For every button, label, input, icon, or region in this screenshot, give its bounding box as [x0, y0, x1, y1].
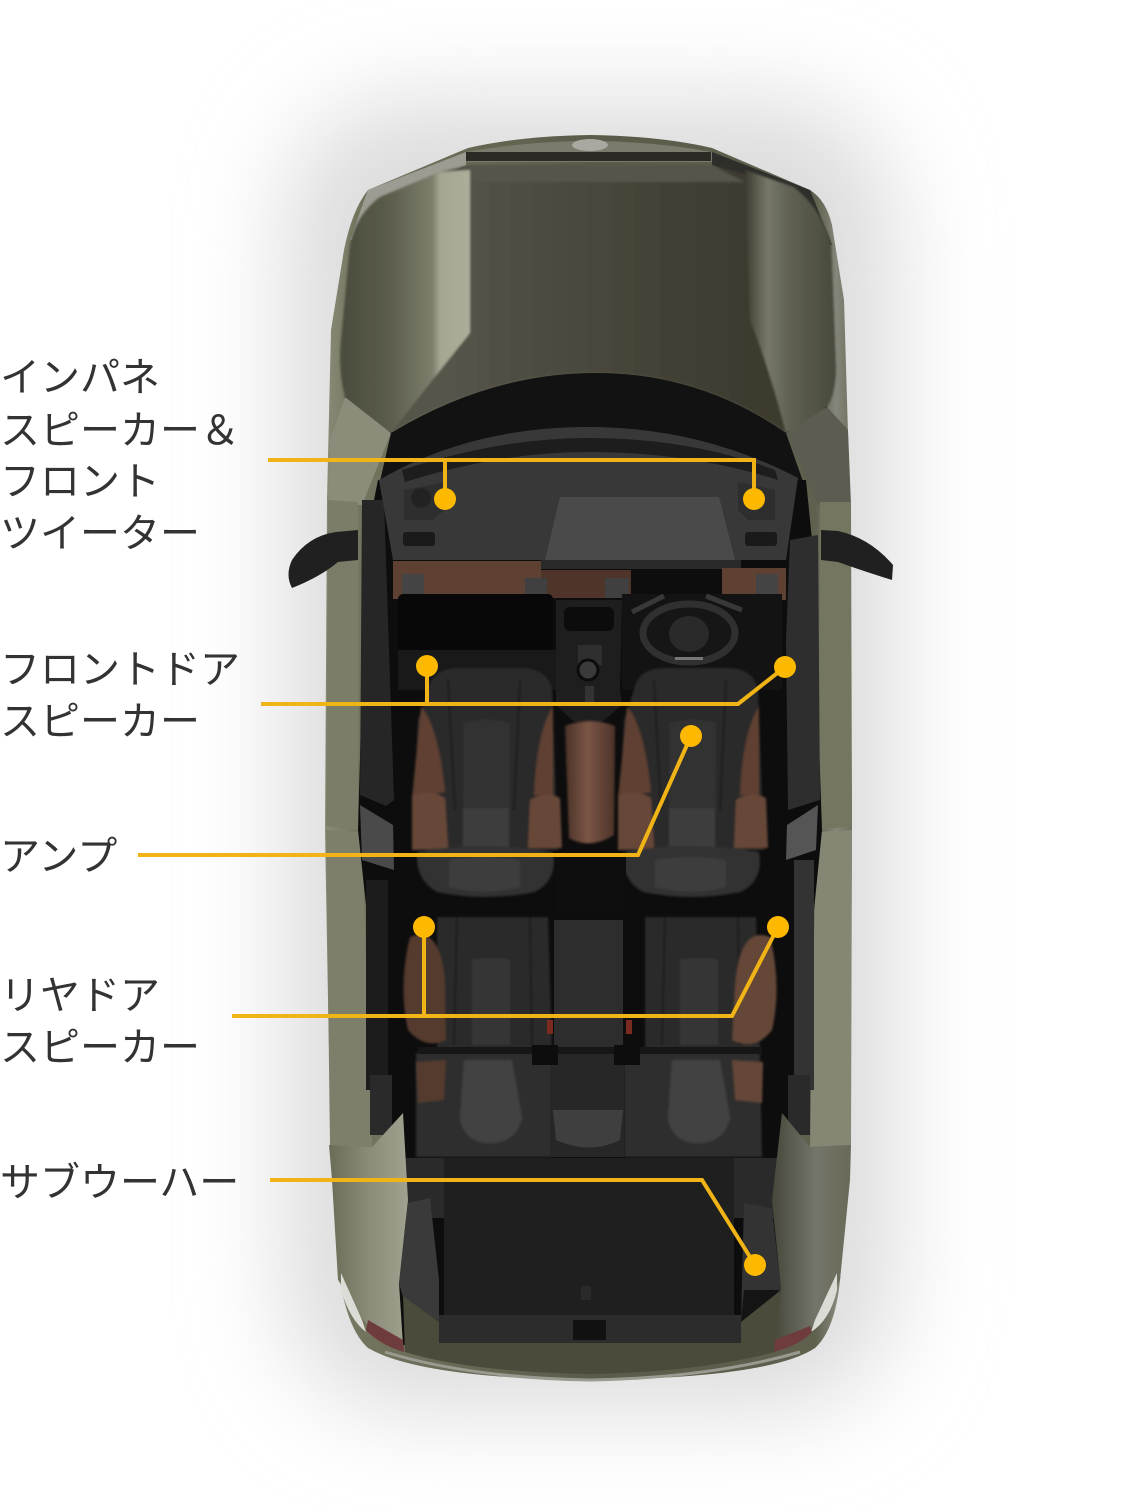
leader: front door [261, 655, 796, 704]
right door trim [786, 535, 820, 810]
label: dashboard speaker and front tweeter: インパネ [0, 356, 160, 400]
armrest [565, 721, 615, 843]
right mirror [821, 530, 893, 580]
label: rear door speaker [0, 974, 200, 1070]
bonnet seams [345, 397, 827, 433]
rear right seat [624, 917, 762, 1157]
rear center seat [418, 920, 762, 1157]
leader: subwoofer [270, 1180, 766, 1276]
dashboard [379, 427, 798, 560]
car body [325, 135, 852, 1380]
interior floor [358, 480, 822, 1345]
front bumper and grille [350, 139, 832, 245]
brown trim band [393, 561, 786, 600]
leader: rear door [232, 916, 789, 1016]
footwell floor [398, 650, 558, 690]
car shadow [285, 100, 895, 1410]
bonnet [340, 165, 836, 433]
callouts [138, 460, 796, 1276]
label: front door speaker: フロントドア [0, 648, 240, 692]
label: dashboard speaker and front tweeter: スピーカー＆ [0, 409, 240, 453]
leader: amp [138, 725, 702, 855]
car top view [288, 135, 893, 1380]
label: rear door speaker: リヤドア [0, 974, 160, 1018]
center display [541, 497, 741, 569]
label: dashboard speaker and front tweeter: ツイーター [0, 512, 200, 556]
rear left seat [416, 917, 554, 1157]
label: rear door speaker: スピーカー [0, 1026, 200, 1070]
center console [556, 600, 622, 722]
left mirror [288, 530, 358, 588]
cargo side trims [399, 1198, 781, 1345]
tail lights [341, 1273, 837, 1352]
side panels [326, 397, 852, 1147]
label: dashboard speaker and front tweeter: フロント [0, 460, 160, 504]
rear bumper [403, 1290, 781, 1374]
cargo area [405, 1158, 777, 1343]
cowl and wiper well [378, 373, 806, 490]
glove box [398, 594, 553, 652]
right door sill [786, 805, 818, 860]
leader: dashboard and tweeter [268, 460, 765, 510]
label: dashboard speaker and front tweeter [0, 356, 240, 556]
floor behind front seats [556, 852, 626, 917]
left door trim [360, 500, 394, 806]
driver footwell [622, 594, 782, 690]
label: amp: アンプ [0, 835, 117, 879]
rear door trims [366, 860, 814, 1135]
rear quarter panels [329, 1113, 851, 1345]
label: subwoofer: サブウーハー [0, 1161, 239, 1205]
front left seat [412, 668, 562, 897]
label: front door speaker: スピーカー [0, 700, 200, 744]
rear seat brown bolsters [403, 935, 777, 1103]
label: front door speaker [0, 648, 240, 744]
left door sill [360, 805, 394, 870]
front right seat [618, 668, 768, 897]
steering wheel [632, 596, 742, 662]
